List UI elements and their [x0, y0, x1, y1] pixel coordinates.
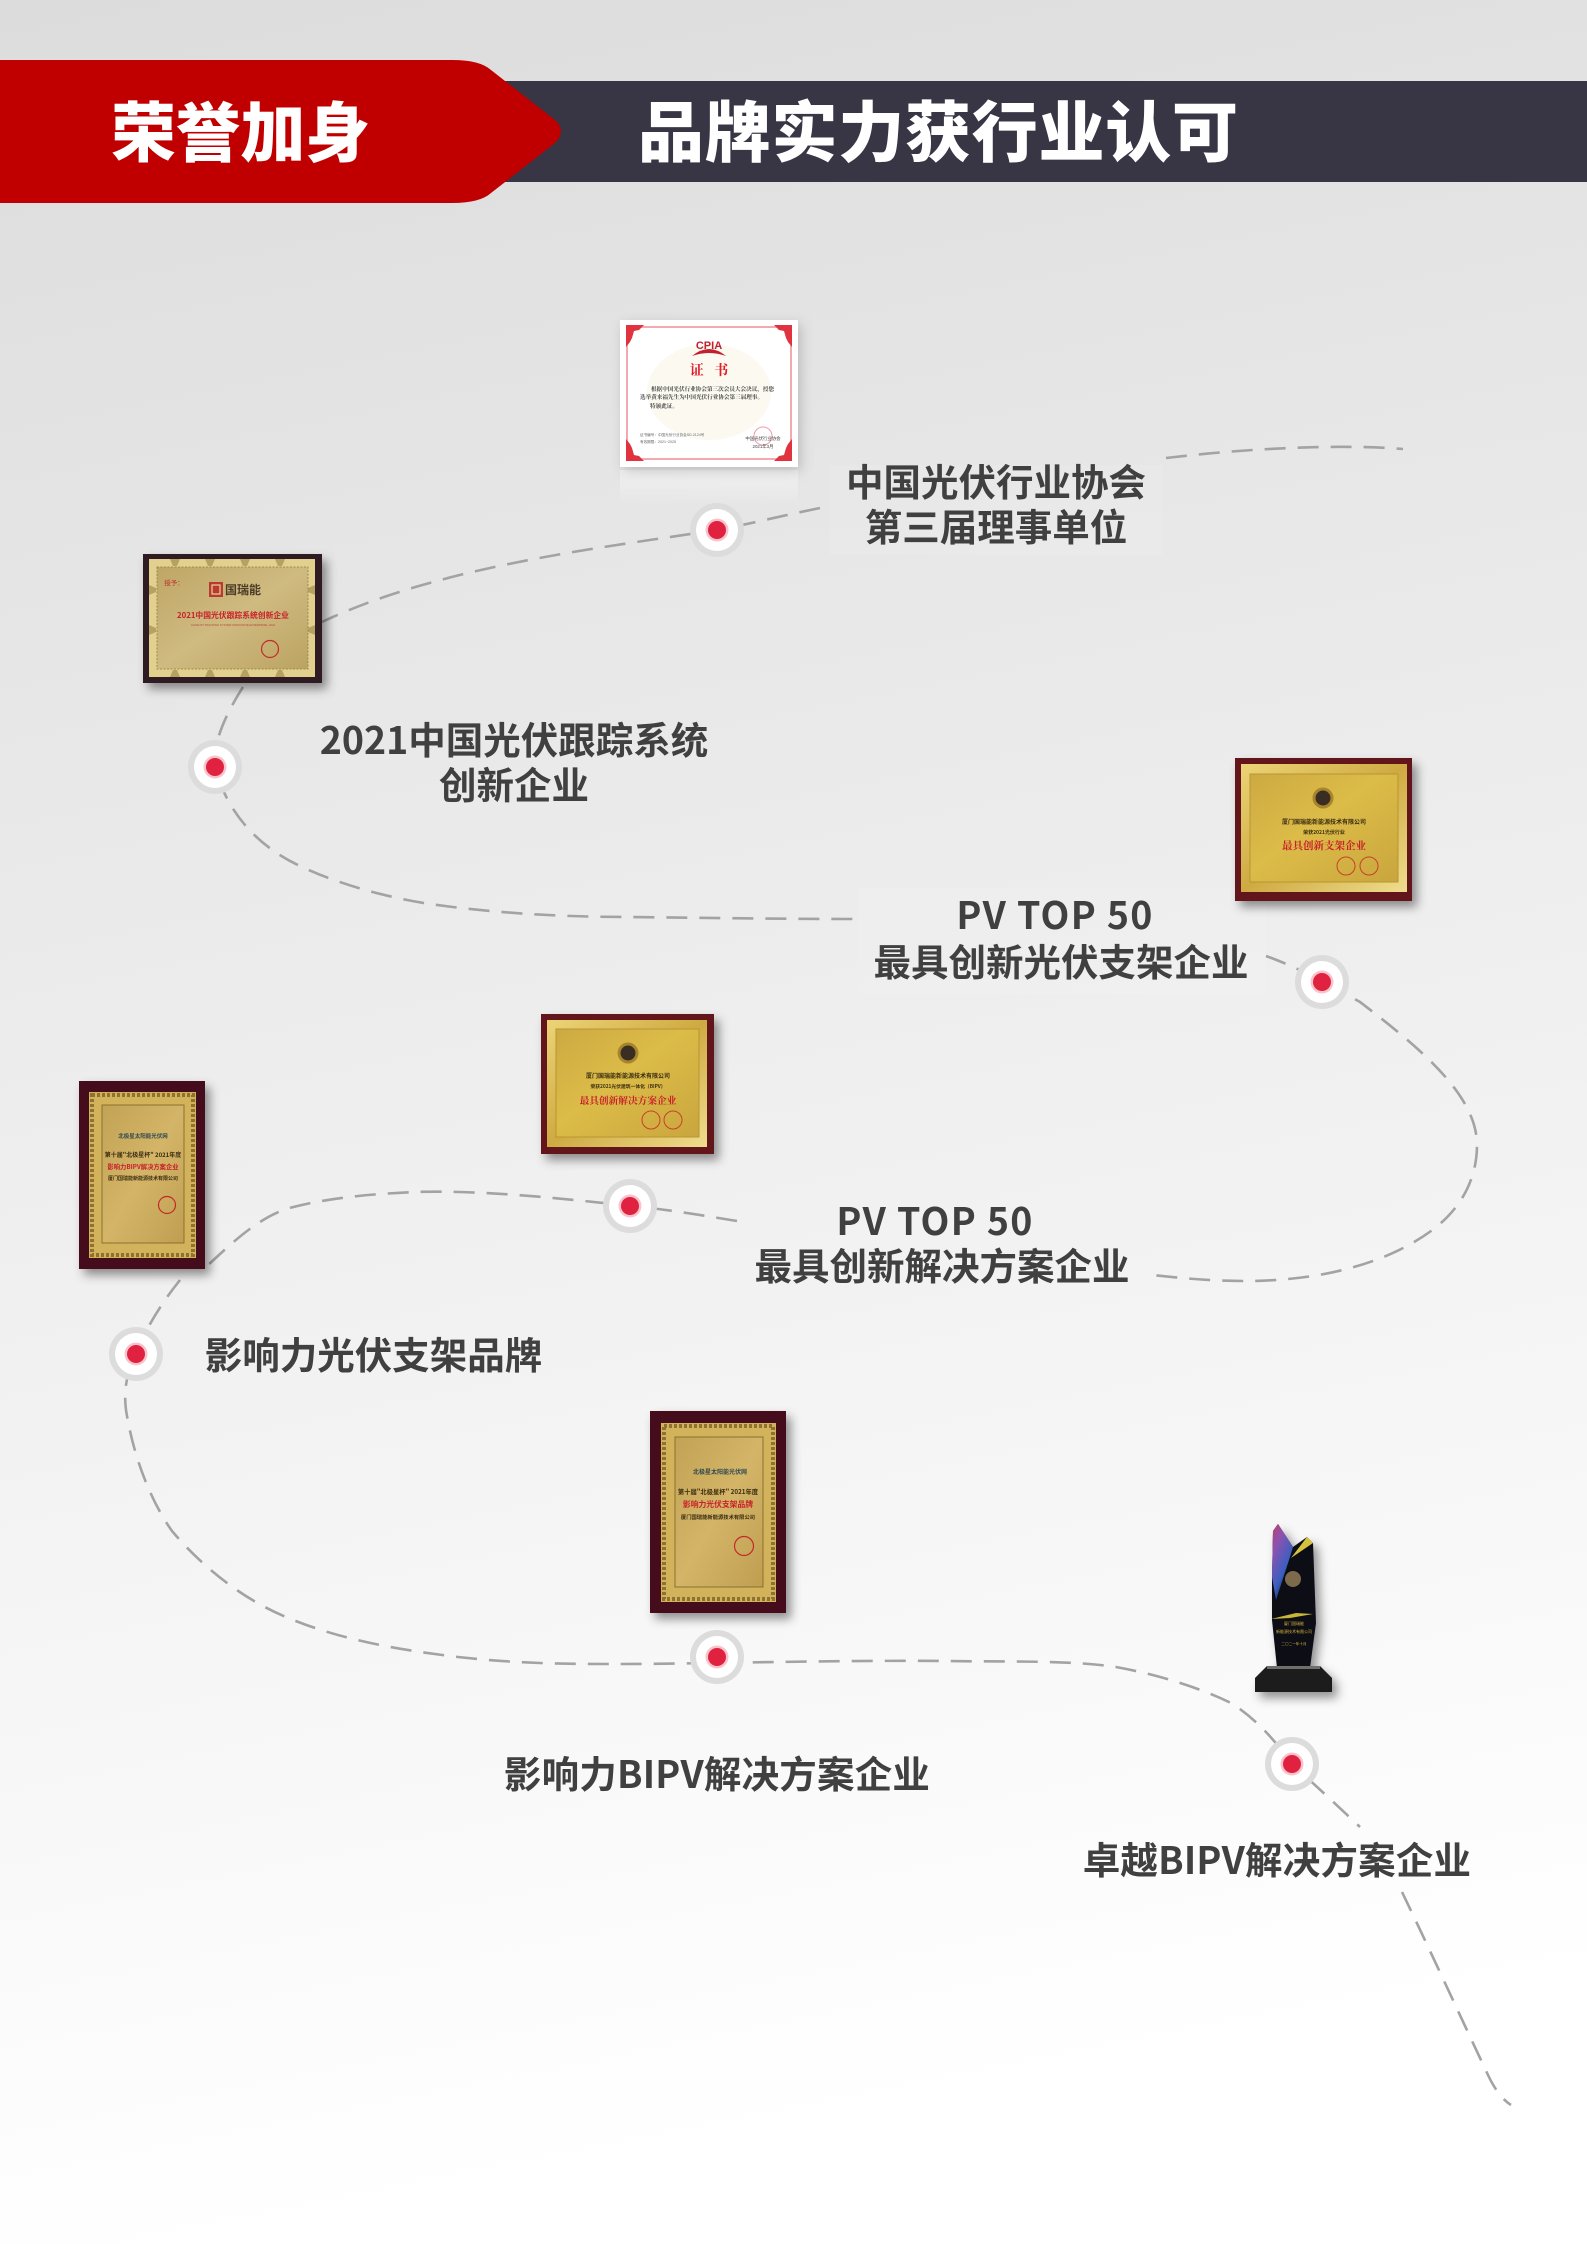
- node 5: [109, 1327, 163, 1381]
- emblem: [1312, 788, 1334, 808]
- timeline nodes: [109, 503, 1349, 1791]
- award: innovative solution plaque: 最具创新解决方案企业: [580, 1093, 677, 1107]
- heading: brand strength recognised: 品牌实力获行业认可: [638, 80, 1238, 176]
- award: crystal trophy: 厦门国瑞能: [1284, 1620, 1304, 1626]
- label: tracking system enterprise: 2021中国光伏跟踪系统: [320, 710, 708, 765]
- award: CPIA certificate: 2021年3月: [752, 443, 774, 450]
- award: innovative mounting plaque: 厦门国瑞能新能源技术有限公司: [1282, 817, 1366, 826]
- award: influential mounting plaque: 影响力光伏支架品牌: [683, 1499, 753, 1510]
- award: CPIA certificate: 证书编号：中国光伏行业协会SD.2124号: [640, 432, 705, 437]
- award: influential BIPV plaque: [79, 1081, 205, 1269]
- award: CPIA certificate: 选举黄来福先生为中国光伏行业协会第三届理事。: [640, 393, 763, 401]
- award: CPIA certificate: 特颁此证。: [650, 402, 678, 410]
- award: crystal trophy: [1255, 1524, 1332, 1692]
- certificate reflection: [620, 470, 798, 506]
- red arrow tab: [0, 60, 561, 203]
- label: CPIA council member: 第三届理事单位: [865, 497, 1127, 552]
- award: influential BIPV plaque: 厦门国瑞能新能源技术有限公司: [108, 1175, 178, 1182]
- award: CPIA certificate: [620, 320, 798, 506]
- dashed timeline path: [125, 447, 1511, 2105]
- award: tracking system plaque: 授予：: [164, 578, 184, 587]
- award: innovative mounting plaque: 最具创新支架企业: [1282, 838, 1366, 853]
- award: crystal trophy: 二〇二一年十月: [1281, 1641, 1307, 1646]
- award: influential mounting plaque: [650, 1411, 786, 1613]
- award: CPIA certificate: 证 书: [690, 360, 729, 380]
- award: innovative mounting plaque: [1235, 758, 1412, 901]
- header band: dark title strip: [0, 60, 1587, 203]
- heading: honor: 荣誉加身: [111, 81, 370, 175]
- label: PV TOP 50 solution: 最具创新解决方案企业: [754, 1236, 1130, 1291]
- award: CPIA certificate: CPIA: [696, 340, 722, 352]
- label: tracking system enterprise: 创新企业: [439, 755, 589, 810]
- emblem: [618, 1042, 638, 1064]
- award: influential BIPV plaque: 影响力BIPV解决方案企业: [107, 1162, 179, 1171]
- node 6: [690, 1630, 744, 1684]
- award: CPIA certificate: 根据中国光伏行业协会第三次会员大会决议，授您: [651, 385, 774, 394]
- label: excellent BIPV enterprise: 卓越BIPV解决方案企业: [1083, 1830, 1471, 1885]
- node 3: [1295, 955, 1349, 1009]
- award: tracking system plaque: CHINA PV TRACKING SYSTEM INNOVATIVE ENTERPRISE, 2021: [191, 623, 276, 627]
- award: influential mounting plaque: 厦门国瑞能新能源技术有限公司: [681, 1513, 755, 1521]
- label: CPIA council member: 中国光伏行业协会: [846, 452, 1146, 507]
- award: influential mounting plaque: 第十届"北极星杯" 2021年度: [678, 1487, 759, 1496]
- award: tracking system plaque: [143, 554, 322, 683]
- label: PV TOP 50 mounting: PV TOP 50: [956, 885, 1154, 940]
- node 1: [690, 503, 744, 557]
- award: innovative mounting plaque: 荣获2021光伏行业: [1303, 829, 1345, 836]
- award: tracking system plaque: 国瑞能: [225, 582, 261, 597]
- award: innovative solution plaque: [541, 1014, 714, 1154]
- award: influential BIPV plaque: 北极星太阳能光伏网: [118, 1132, 168, 1140]
- award: influential BIPV plaque: 第十届"北极星杯" 2021年度: [105, 1150, 181, 1159]
- award: innovative solution plaque: 厦门国瑞能新能源技术有限公司: [586, 1071, 670, 1080]
- node 4: [603, 1179, 657, 1233]
- label: PV TOP 50 solution: PV TOP 50: [836, 1191, 1034, 1246]
- node 2: [188, 740, 242, 794]
- label: influential BIPV enterprise: 影响力BIPV解决方案企业: [504, 1744, 930, 1799]
- award: CPIA certificate: 有效期限：2021~2025: [640, 439, 676, 444]
- award: influential mounting plaque: 北极星太阳能光伏网: [693, 1468, 747, 1476]
- node 7: [1265, 1737, 1319, 1791]
- award: innovative solution plaque: 荣获2021光伏建筑一体化（BIPV）: [590, 1083, 666, 1090]
- label: influential mounting brand: 影响力光伏支架品牌: [205, 1325, 542, 1380]
- award: crystal trophy: 新能源技术有限公司: [1276, 1628, 1312, 1634]
- award: tracking system plaque: 2021中国光伏跟踪系统创新企业: [177, 610, 289, 621]
- award: CPIA certificate: 中国光伏行业协会: [745, 435, 781, 442]
- label: PV TOP 50 mounting: 最具创新光伏支架企业: [874, 932, 1248, 987]
